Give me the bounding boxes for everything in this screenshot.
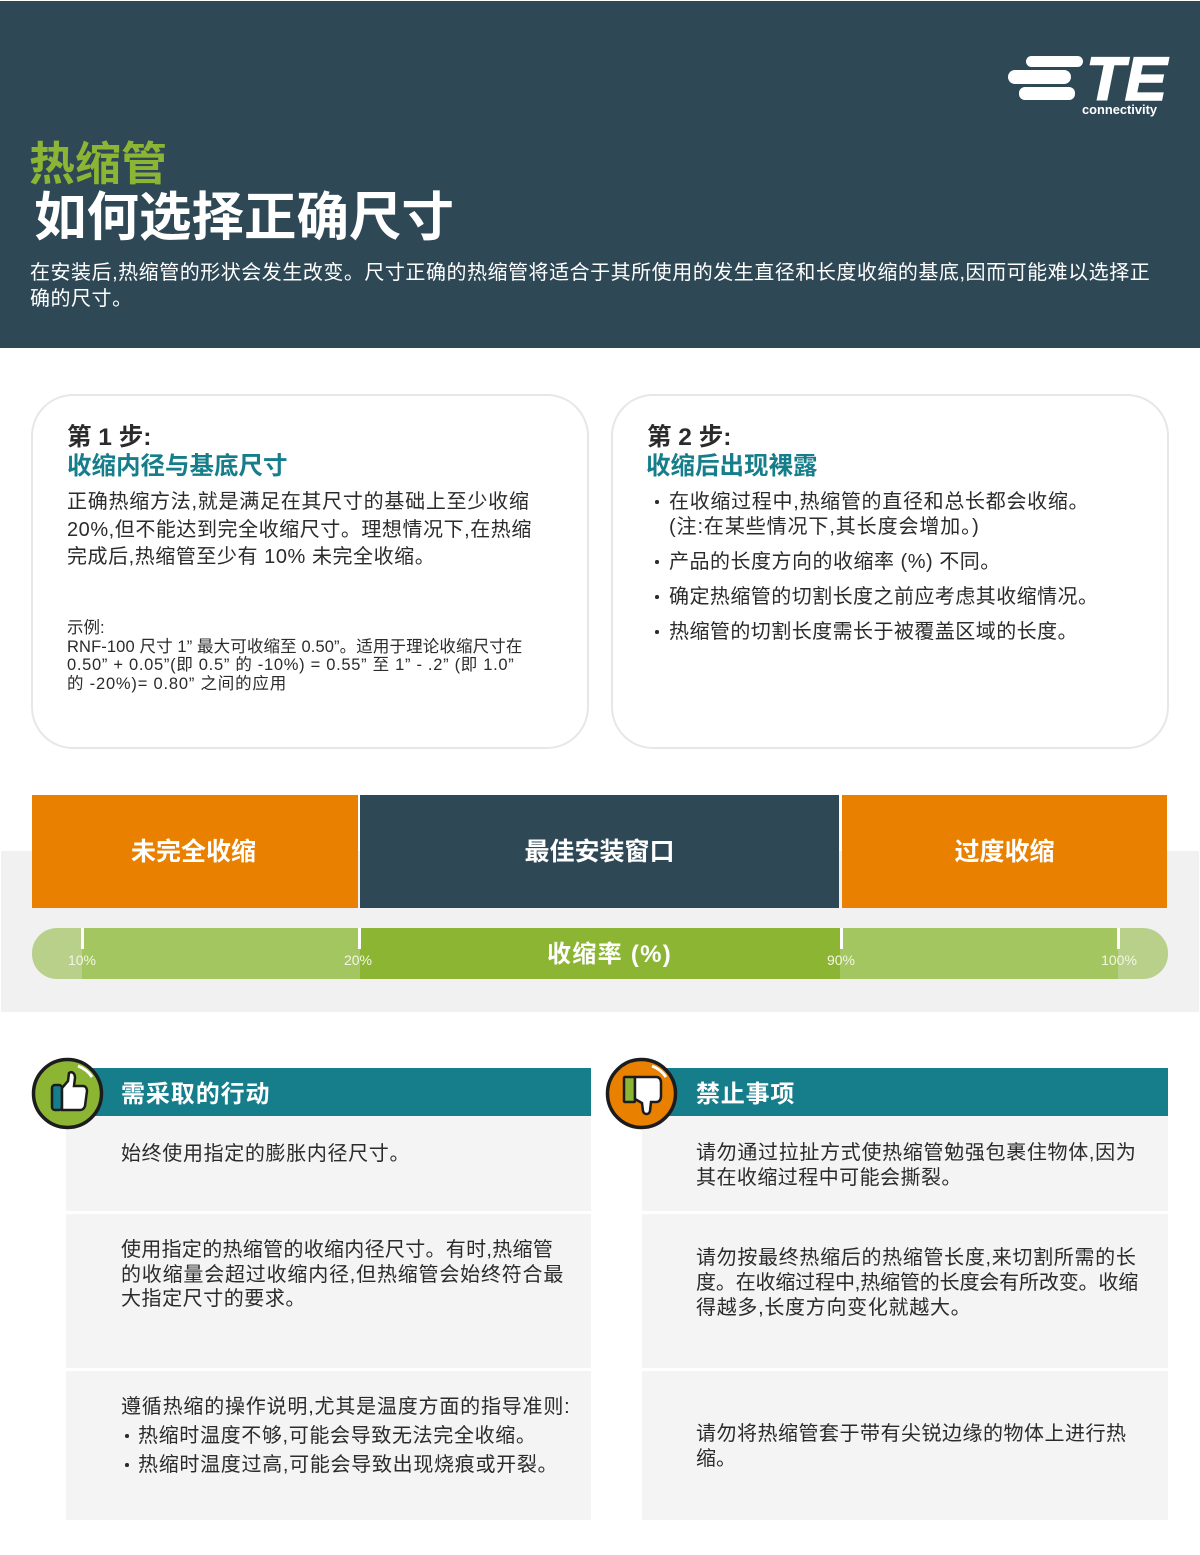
don't text 3 [696, 1423, 1126, 1470]
do row 1 [66, 1116, 591, 1211]
scale title: 收缩率 (%) [547, 941, 672, 968]
don't text 2 [696, 1247, 1138, 1319]
icon: thumbs up [32, 1058, 104, 1130]
don't text 1 [696, 1142, 1137, 1189]
step 1 example: 的 -20%)= 0.80” 之间的应用 [67, 674, 287, 692]
intro text [30, 262, 1150, 310]
do text 1: 始终使用指定的膨胀内径尺寸。 [121, 1143, 410, 1165]
do text 2: 大指定尺寸的要求。 [121, 1288, 306, 1310]
don't text 3: 请勿将热缩管套于带有尖锐边缘的物体上进行热 [696, 1423, 1126, 1445]
step 1 example: RNF-100 尺寸 1” 最大可收缩至 0.50”。适用于理论收缩尺寸在 [67, 638, 522, 656]
step 1 body text [67, 491, 532, 568]
title: product name: 热缩管 [29, 138, 167, 190]
don't text 3: 缩。 [696, 1448, 736, 1470]
intro text: 确的尺寸。 [30, 288, 133, 310]
step 1 example: 示例: [67, 619, 105, 637]
panel: step 2 [611, 394, 1169, 749]
do heading: 需采取的行动 [121, 1081, 270, 1108]
don't row 3 [642, 1371, 1168, 1520]
logo: TE connectivity: connectivity [1082, 102, 1158, 117]
do row 2 [66, 1214, 591, 1368]
bar: under-shrunk [32, 795, 358, 908]
title: how to choose size: 如何选择正确尺寸 [34, 188, 454, 247]
icon: thumbs down [606, 1058, 678, 1130]
don't text 1: 其在收缩过程中可能会撕裂。 [696, 1167, 962, 1189]
step 2 bullet list: 在收缩过程中,热缩管的直径和总长都会收缩。 [669, 491, 1089, 513]
step 2 bullet list: (注:在某些情况下,其长度会增加。) [669, 516, 980, 538]
do text 2: 使用指定的热缩管的收缩内径尺寸。有时,热缩管 [121, 1239, 553, 1261]
bar: under-shrunk: 未完全收缩 [131, 838, 256, 866]
step 1 example [67, 619, 522, 692]
don't text 2: 度。在收缩过程中,热缩管的长度会有所改变。收缩 [696, 1272, 1138, 1294]
step 2 bullet list: 热缩管的切割长度需长于被覆盖区域的长度。 [669, 621, 1078, 643]
step 1 body text: 完成后,热缩管至少有 10% 未完全收缩。 [67, 546, 435, 568]
don't header bar [640, 1068, 1168, 1116]
step 2 bullet list: 确定热缩管的切割长度之前应考虑其收缩情况。 [669, 586, 1098, 608]
step 2 heading: 收缩后出现裸露 [646, 453, 818, 480]
do text 2 [121, 1238, 564, 1310]
scale label 100%: 100% [1101, 952, 1137, 968]
header banner [0, 1, 1200, 348]
step 1 label: 第 1 步: [67, 424, 151, 451]
panel: do column: 热缩时温度不够,可能会导致无法完全收缩。 [138, 1425, 537, 1447]
step 2 label: 第 2 步: [647, 424, 731, 451]
panel: do column: 热缩时温度过高,可能会导致出现烧痕或开裂。 [138, 1454, 558, 1476]
scale label 90%: 90% [827, 952, 855, 968]
intro text: 在安装后,热缩管的形状会发生改变。尺寸正确的热缩管将适合于其所使用的发生直径和长度收缩的基底,因而可能难以选择正 [30, 262, 1150, 284]
step 1 example: 0.50” + 0.05”(即 0.5” 的 -10%) = 0.55” 至 1” - .2” (即 1.0” [67, 656, 514, 674]
do text 3: 遵循热缩的操作说明,尤其是温度方面的指导准则: [121, 1396, 571, 1418]
don't row 2 [642, 1214, 1168, 1368]
bar: over-shrunk [842, 795, 1167, 908]
panel: don't column [606, 1058, 1168, 1520]
step 2 bullet list [655, 491, 1098, 643]
do header bar [66, 1068, 591, 1116]
scale label 10%: 10% [68, 952, 96, 968]
grey band behind shrink chart [1, 851, 1199, 1012]
scale label 20%: 20% [344, 952, 372, 968]
bar: optimal install window [360, 795, 839, 908]
don't text 2: 得越多,长度方向变化就越大。 [696, 1297, 971, 1319]
don't row 1 [642, 1116, 1168, 1211]
shrink rate scale [32, 928, 1168, 979]
step 1 body text: 20%,但不能达到完全收缩尺寸。理想情况下,在热缩 [67, 518, 532, 540]
don't heading: 禁止事项 [696, 1081, 795, 1108]
logo: TE connectivity [1008, 50, 1170, 117]
panel: step 1 [31, 394, 589, 749]
step 1 body text: 正确热缩方法,就是满足在其尺寸的基础上至少收缩 [67, 491, 530, 513]
don't text 2: 请勿按最终热缩后的热缩管长度,来切割所需的长 [696, 1247, 1137, 1269]
bar: optimal install window: 最佳安装窗口 [524, 838, 674, 866]
bar: over-shrunk: 过度收缩 [954, 838, 1054, 866]
panel: do column [32, 1058, 591, 1520]
do row 3 [66, 1371, 591, 1520]
step 2 bullet list: 产品的长度方向的收缩率 (%) 不同。 [669, 551, 1001, 573]
step 1 heading: 收缩内径与基底尺寸 [67, 453, 288, 480]
do text 2: 的收缩量会超过收缩内径,但热缩管会始终符合最 [121, 1264, 564, 1286]
don't text 1: 请勿通过拉扯方式使热缩管勉强包裹住物体,因为 [696, 1142, 1137, 1164]
